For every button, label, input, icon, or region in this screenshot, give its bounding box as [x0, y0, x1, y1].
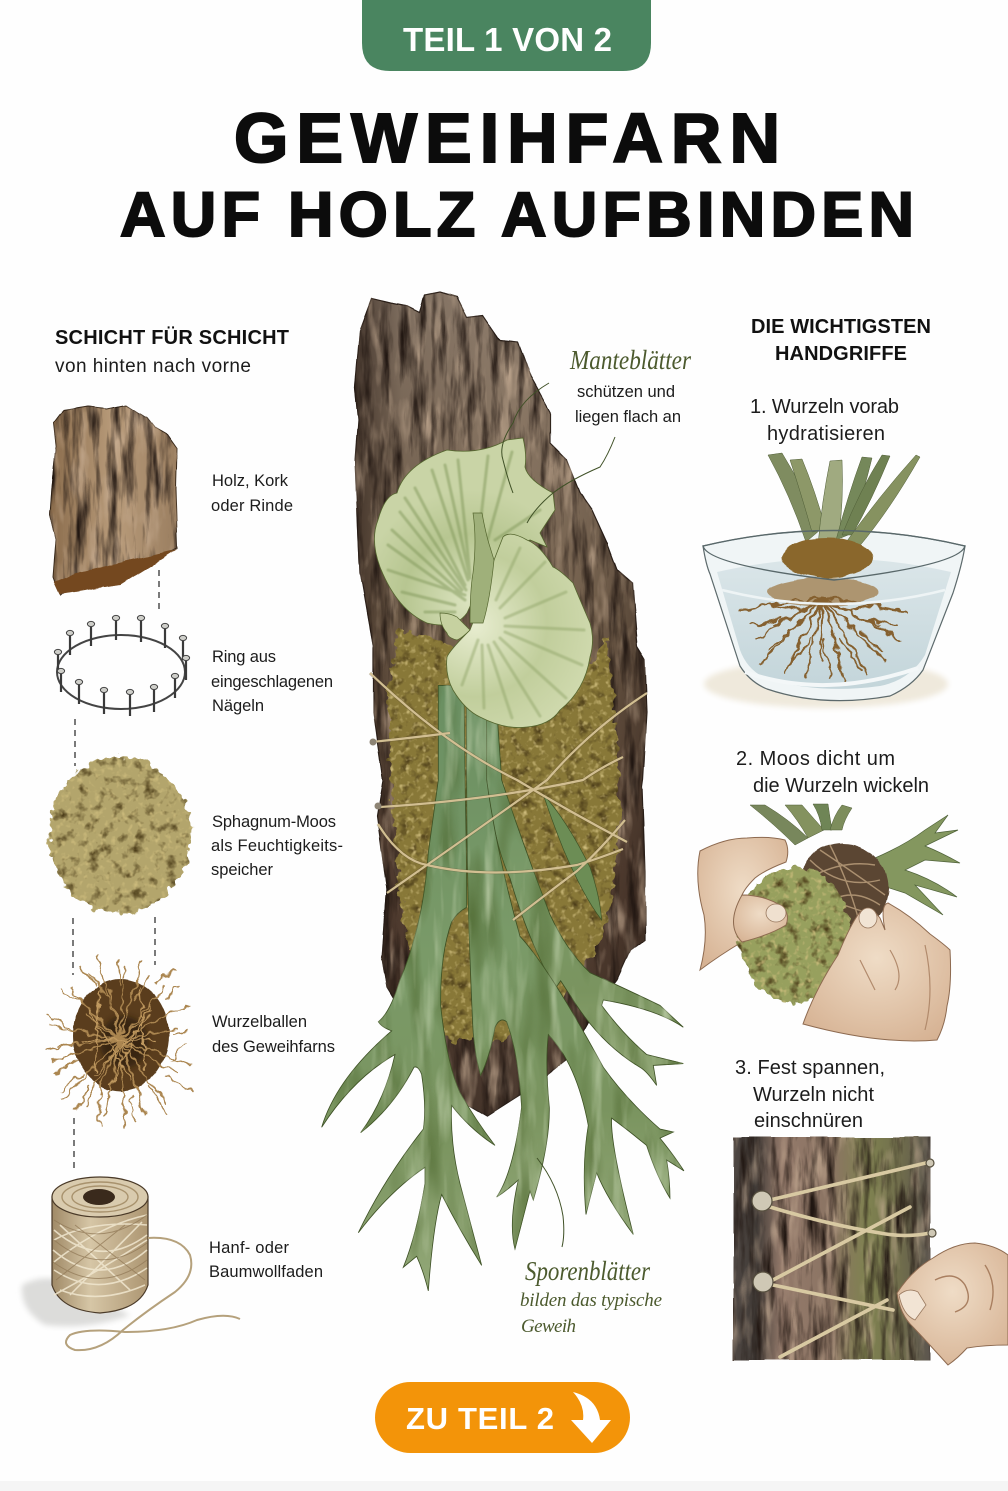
- label: Wurzelballen: Wurzelballen: [212, 1013, 307, 1031]
- icon: curved arrow: [571, 1392, 611, 1443]
- illustration: hands wrapping moss: [698, 804, 960, 1041]
- button: Zu Teil 2: [375, 1382, 630, 1453]
- label: Wurzelballen: [212, 1013, 335, 1056]
- mantle frond: small leaf and stem: [440, 513, 494, 640]
- button: Zu Teil 2: ZU TEIL 2: [406, 1401, 554, 1436]
- step 3 text: 3. Fest spannen,: [735, 1057, 885, 1079]
- label: Ring: eingeschlagenen: [211, 673, 333, 691]
- label: Sphagnum: speicher: [211, 861, 274, 879]
- label: Sphagnum: Sphagnum-Moos: [212, 813, 336, 831]
- step 2 text: die Wurzeln wickeln: [753, 775, 929, 797]
- fern blades: [768, 453, 920, 548]
- frond: small inner: [543, 795, 602, 920]
- label: Sphagnum: [211, 813, 343, 879]
- label: Ring: Nägeln: [212, 697, 264, 715]
- label: Holz: [211, 472, 293, 515]
- illustration: bowl with fern roots: [703, 453, 965, 708]
- bark slab: [355, 292, 647, 1116]
- callout: Sporenblätter: [520, 1158, 662, 1337]
- icon: ring of nails: [54, 615, 190, 716]
- heading: Die wichtigsten Handgriffe: DIE WICHTIGSTEN: [751, 316, 931, 338]
- title: AUF HOLZ AUFBINDEN: [120, 180, 914, 250]
- panel: staghorn fern on bark: [322, 292, 684, 1291]
- badge: Teil 1 von 2: TEIL 1 VON 2: [403, 21, 612, 58]
- icon: wood block: [50, 405, 178, 595]
- icon: root ball: [45, 955, 190, 1128]
- callout: Mantelblätter: liegen flach an: [575, 408, 681, 426]
- label: Hanf: Hanf- oder: [209, 1239, 290, 1257]
- label: Sphagnum: als Feuchtigkeits-: [211, 837, 343, 855]
- mantle frond: lower: [447, 534, 592, 728]
- frond: centre: [467, 685, 684, 1249]
- panel: key steps right column: [698, 316, 1008, 1365]
- heading: Schicht für Schicht: SCHICHT FÜR SCHICHT: [55, 326, 289, 349]
- step 3 text: Wurzeln nicht: [753, 1084, 874, 1106]
- step 1 text: [750, 396, 899, 445]
- moss bed: [388, 630, 620, 1040]
- badge: Teil 1 von 2: [362, 0, 651, 71]
- step 1 text: 1. Wurzeln vorab: [750, 396, 899, 418]
- callout: Mantelblätter: [502, 345, 691, 523]
- frond: right: [483, 707, 683, 1085]
- step 3 text: einschnüren: [754, 1110, 863, 1132]
- step 2 text: 2. Moos dicht um: [736, 748, 895, 770]
- heading: Schicht für Schicht: von hinten nach vorne: [55, 356, 251, 377]
- icon: sphagnum moss ball: [49, 757, 191, 913]
- panel: layers left column: [22, 326, 343, 1350]
- callout: Sporenblätter: Sporenblätter: [525, 1256, 650, 1286]
- label: Holz: oder Rinde: [211, 497, 293, 515]
- icon: twine spool: [22, 1177, 240, 1350]
- label: Wurzelballen: des Geweihfarns: [212, 1038, 335, 1056]
- label: Ring: [211, 648, 333, 715]
- callout: Sporenblätter: Geweih: [521, 1316, 576, 1337]
- heading: Die wichtigsten Handgriffe: HANDGRIFFE: [775, 343, 907, 365]
- mantle frond: upper: [374, 438, 555, 625]
- step 1 text: hydratisieren: [767, 423, 885, 445]
- frond: left: [322, 685, 495, 1291]
- twine lashing: [370, 673, 647, 920]
- label: Hanf: Baumwollfaden: [209, 1263, 323, 1281]
- step 2 text: [736, 748, 929, 797]
- callout: Mantelblätter: Manteblätter: [569, 345, 691, 375]
- label: Hanf: [209, 1239, 323, 1281]
- title: GEWEIHFARN: [234, 99, 780, 177]
- heading: Schicht für Schicht: [55, 326, 289, 377]
- label: Ring: Ring aus: [212, 648, 276, 666]
- heading: Die wichtigsten Handgriffe: [751, 316, 931, 365]
- callout: Sporenblätter: bilden das typische: [520, 1290, 662, 1311]
- dashed connectors: [73, 570, 159, 1170]
- antler fronds: [322, 685, 684, 1291]
- title: [120, 99, 914, 250]
- step 3 text: [735, 1057, 885, 1132]
- label: Holz: Holz, Kork: [212, 472, 289, 490]
- illustration: tensioning twine over nails: [733, 1137, 1008, 1365]
- callout: Mantelblätter: schützen und: [577, 383, 675, 401]
- roots: [742, 597, 905, 682]
